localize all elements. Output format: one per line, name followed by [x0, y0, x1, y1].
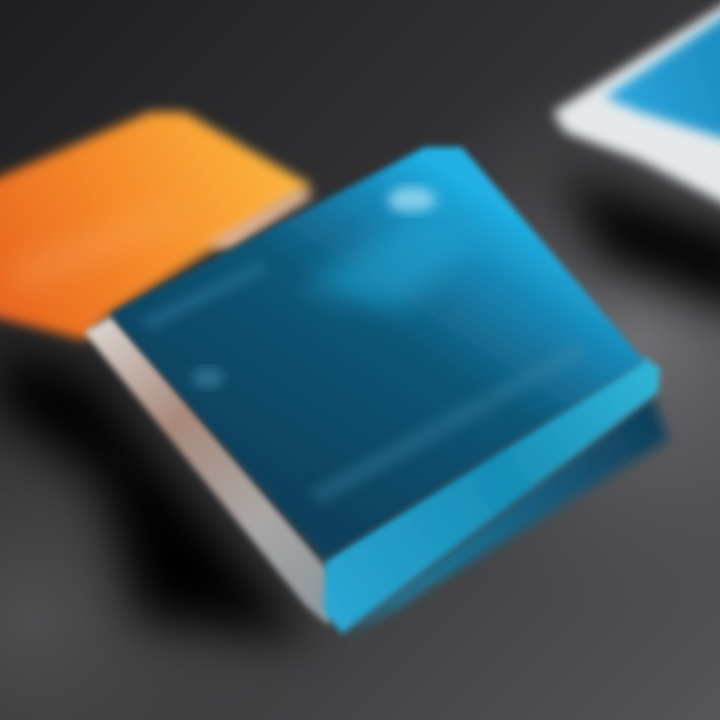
card: main blue card: [110, 147, 645, 560]
card edge: peach top rim: [205, 188, 314, 250]
card: orange back card: [0, 112, 312, 340]
card: blue lower underside: [345, 395, 668, 635]
highlight: orange card streak: [10, 205, 190, 290]
card: blue lower rim: [324, 358, 660, 634]
card details: blue card highlights: [140, 187, 590, 505]
shadow: under front cards: [0, 170, 720, 640]
card: top-right blue card: [605, 0, 720, 150]
card edge: white side of blue card: [84, 316, 345, 625]
card: top-right white rim: [553, 0, 720, 222]
